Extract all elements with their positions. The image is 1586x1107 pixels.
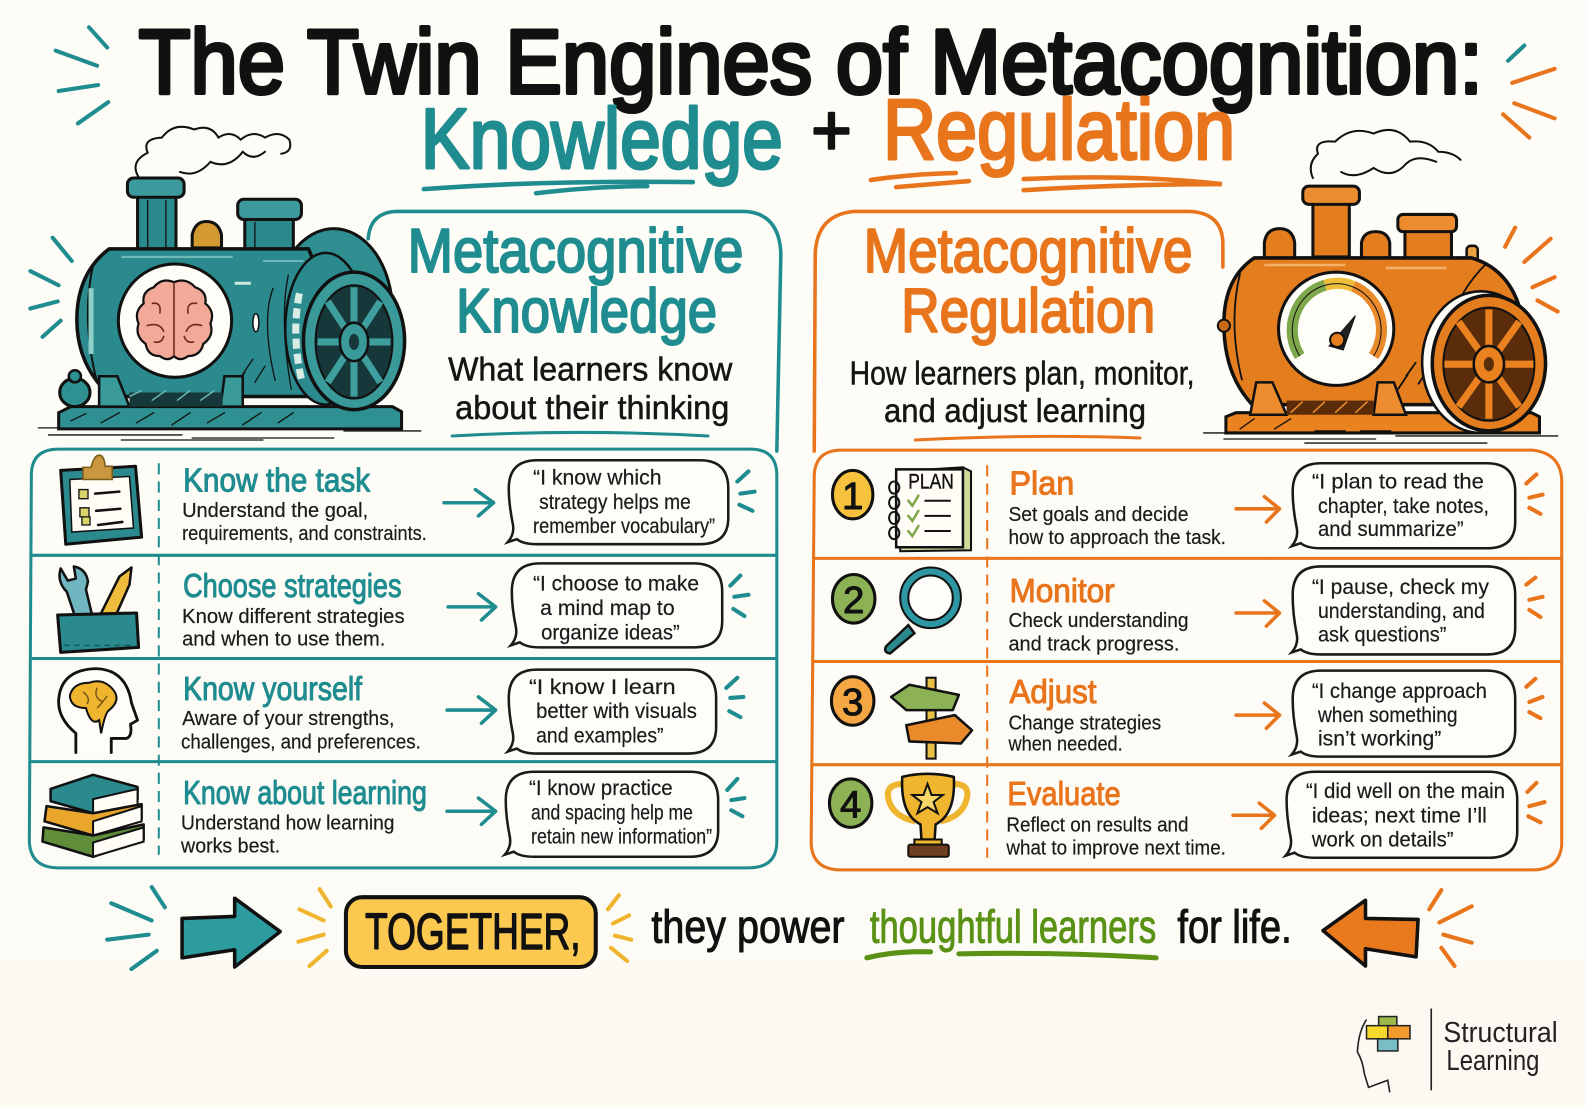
chimney back bbox=[245, 214, 293, 253]
rays bbox=[1526, 474, 1543, 514]
icon: magnifying glass bbox=[885, 567, 961, 653]
row: evaluate bbox=[829, 772, 1545, 860]
speech bubble bbox=[1286, 772, 1517, 858]
description: works best. bbox=[180, 836, 280, 858]
description bbox=[1008, 610, 1188, 655]
gauge bbox=[1279, 272, 1394, 385]
title word: Regulation: Regulation bbox=[883, 83, 1235, 178]
engine: regulation (orange with gauge) bbox=[1204, 130, 1558, 443]
knowledge underline bbox=[424, 182, 693, 193]
section heading: Metacognitive bbox=[408, 217, 743, 286]
speech bubble bbox=[508, 670, 716, 754]
engine rays right bbox=[1505, 228, 1558, 312]
speech bubble: retain new information” bbox=[531, 825, 712, 849]
speech bubble: remember vocabulary” bbox=[533, 514, 715, 538]
description: Check understanding bbox=[1008, 610, 1188, 632]
subtitle underline bbox=[915, 436, 1140, 440]
arrow bbox=[1236, 497, 1280, 522]
boiler body bbox=[1224, 258, 1525, 405]
flange bbox=[275, 229, 392, 394]
row: know about learning bbox=[42, 772, 744, 858]
regulation underline bbox=[871, 173, 1222, 190]
speech bubble: strategy helps me bbox=[539, 490, 691, 514]
legs and pump bbox=[99, 376, 243, 407]
panel: metacognitive knowledge bbox=[29, 211, 781, 868]
number badge 4 bbox=[829, 779, 872, 827]
description: Reflect on results and bbox=[1006, 814, 1188, 836]
window with brain bbox=[118, 264, 232, 377]
speech bubble: “I know practice bbox=[529, 776, 673, 800]
title bbox=[139, 12, 1483, 193]
arrow bbox=[448, 594, 496, 620]
icon: head with yellow brain bbox=[59, 669, 138, 753]
speech bubble: “I know which bbox=[533, 466, 662, 490]
speech bubble: organize ideas” bbox=[541, 620, 680, 644]
heading: Choose strategies bbox=[183, 568, 402, 605]
arrow bbox=[447, 798, 496, 824]
list frame bbox=[811, 450, 1562, 870]
logo divider bbox=[1430, 1008, 1432, 1090]
panel: metacognitive regulation bbox=[811, 211, 1562, 870]
number badge 1 bbox=[832, 470, 873, 519]
speech bubble bbox=[505, 772, 718, 857]
gauge dial arcs bbox=[1292, 285, 1325, 356]
speech bubble: ideas; next time I’ll bbox=[1312, 803, 1487, 827]
speech bubble bbox=[511, 563, 722, 647]
speech bubble: chapter, take notes, bbox=[1318, 494, 1489, 518]
section heading: Knowledge bbox=[456, 277, 717, 346]
description: Aware of your strengths, bbox=[182, 708, 394, 730]
section heading bbox=[864, 217, 1193, 346]
gauge needle bbox=[1329, 316, 1355, 350]
orange rays bbox=[1429, 890, 1472, 966]
heading: Know about learning bbox=[183, 775, 427, 812]
row: choose strategies bbox=[58, 563, 748, 652]
description: and track progress. bbox=[1008, 633, 1179, 655]
description bbox=[180, 812, 394, 858]
rays bbox=[726, 678, 743, 717]
row: plan bbox=[832, 463, 1543, 551]
highlighted words: thoughtful learners bbox=[870, 901, 1156, 953]
row: adjust bbox=[831, 671, 1543, 759]
icon: stack of books bbox=[42, 775, 144, 857]
section heading bbox=[408, 217, 743, 346]
speech bubble: and summarize” bbox=[1318, 517, 1464, 541]
engine: knowledge (teal with brain) bbox=[38, 127, 421, 440]
description: how to approach the task. bbox=[1008, 527, 1226, 549]
speech bubble: “I did well on the main bbox=[1306, 779, 1505, 803]
together badge bbox=[346, 897, 596, 967]
speech bubble: when something bbox=[1317, 703, 1458, 727]
logo: structural learning bbox=[1357, 1008, 1558, 1092]
rays bbox=[727, 779, 744, 816]
description: requirements, and constraints. bbox=[182, 523, 427, 545]
title line 1: The Twin Engines of Metacognition: bbox=[139, 12, 1483, 113]
heading: Evaluate bbox=[1007, 776, 1121, 813]
description: Know different strategies bbox=[182, 606, 405, 628]
row: know yourself bbox=[59, 669, 743, 754]
chimneys and domes bbox=[1313, 202, 1349, 257]
speech bubble: ask questions” bbox=[1318, 622, 1446, 646]
title rays left bbox=[56, 27, 108, 123]
section heading: Metacognitive bbox=[864, 217, 1193, 286]
engine rays left bbox=[30, 238, 72, 337]
description: what to improve next time. bbox=[1005, 838, 1226, 860]
header frame bbox=[368, 211, 781, 451]
section subtitle: and adjust learning bbox=[884, 393, 1146, 430]
speech bubble: work on details” bbox=[1311, 828, 1453, 852]
speech bubble: “I plan to read the bbox=[1312, 470, 1484, 494]
title rays right bbox=[1503, 46, 1555, 138]
speech bubble bbox=[508, 460, 728, 544]
number badge 4: 4 bbox=[840, 783, 861, 826]
description bbox=[1008, 504, 1226, 549]
logo blocks bbox=[1367, 1017, 1410, 1051]
section subtitle: What learners know bbox=[448, 351, 733, 388]
base plate bbox=[59, 407, 402, 429]
heading: Know yourself bbox=[183, 671, 363, 708]
section subtitle: How learners plan, monitor, bbox=[850, 355, 1195, 392]
flywheel bbox=[1422, 291, 1546, 433]
icon: toolbox with wrench and pencil bbox=[58, 566, 139, 652]
number badge 3: 3 bbox=[842, 681, 863, 724]
heading: Know the task bbox=[183, 463, 370, 500]
description: Understand the goal, bbox=[182, 500, 368, 522]
description bbox=[1008, 712, 1161, 756]
plus sign: + bbox=[811, 90, 852, 171]
speech bubble: understanding, and bbox=[1318, 599, 1485, 623]
title word: Knowledge: Knowledge bbox=[421, 92, 783, 187]
number badge 2: 2 bbox=[843, 579, 864, 622]
base plate bbox=[1226, 413, 1539, 433]
number badge 2 bbox=[832, 575, 875, 623]
header frame bbox=[814, 211, 1223, 451]
speech bubble bbox=[1292, 463, 1515, 548]
together badge: TOGETHER, bbox=[365, 903, 581, 960]
heading: Monitor bbox=[1009, 573, 1115, 610]
bell bbox=[192, 222, 222, 248]
row: monitor bbox=[832, 566, 1543, 655]
speech bubble: isn’t working” bbox=[1318, 726, 1441, 750]
teal block arrow bbox=[182, 898, 280, 967]
description bbox=[181, 708, 421, 754]
icon: trophy bbox=[888, 774, 967, 857]
rays bbox=[1526, 679, 1543, 718]
green underline bbox=[867, 952, 1156, 958]
yellow rays bbox=[298, 889, 631, 966]
rays bbox=[1526, 578, 1543, 617]
icon: signpost bbox=[891, 678, 972, 759]
arrow bbox=[447, 697, 496, 723]
speech bubble: better with visuals bbox=[536, 699, 697, 723]
rays bbox=[1527, 783, 1545, 822]
speech bubble: and examples” bbox=[536, 723, 664, 747]
legs bbox=[1250, 382, 1406, 415]
speech bubble: and spacing help me bbox=[531, 800, 693, 824]
icon: plan notebook bbox=[889, 467, 971, 551]
list frame bbox=[29, 449, 777, 868]
section subtitle: about their thinking bbox=[455, 390, 729, 427]
number badge 1: 1 bbox=[842, 475, 863, 518]
description: challenges, and preferences. bbox=[181, 732, 421, 754]
flywheel bbox=[285, 253, 405, 410]
description bbox=[182, 500, 427, 545]
speech bubble bbox=[1292, 566, 1515, 654]
orange block arrow bbox=[1323, 900, 1418, 966]
ground strokes bbox=[38, 428, 421, 440]
speech bubble: “I know I learn bbox=[529, 675, 676, 699]
arrow bbox=[444, 490, 494, 516]
ground strokes bbox=[1204, 433, 1558, 443]
section heading: Regulation bbox=[901, 277, 1155, 346]
section subtitle bbox=[850, 355, 1195, 430]
row: know the task bbox=[61, 455, 755, 545]
logo head outline bbox=[1357, 1020, 1390, 1092]
subtitle underline bbox=[452, 432, 708, 436]
description bbox=[1005, 814, 1226, 860]
smoke bbox=[136, 127, 290, 177]
arrow bbox=[1236, 601, 1280, 626]
smoke bbox=[1311, 130, 1461, 178]
icon: pink brain bbox=[137, 281, 212, 359]
speech bubble: a mind map to bbox=[540, 596, 675, 620]
number badge 3 bbox=[831, 677, 874, 725]
section subtitle bbox=[448, 351, 733, 427]
heading: Plan bbox=[1009, 466, 1074, 503]
description: Change strategies bbox=[1008, 712, 1161, 734]
description bbox=[182, 606, 405, 650]
speech bubble: “I choose to make bbox=[533, 572, 699, 596]
banner text: they power bbox=[651, 901, 845, 953]
arrow bbox=[1233, 803, 1274, 828]
description: Understand how learning bbox=[181, 812, 394, 834]
logo wordmark: Learning bbox=[1446, 1045, 1539, 1077]
heading: Adjust bbox=[1009, 674, 1097, 711]
logo wordmark bbox=[1443, 1017, 1558, 1077]
icon: plan notebook: PLAN bbox=[908, 470, 954, 494]
icon: clipboard bbox=[61, 455, 142, 544]
description: Set goals and decide bbox=[1008, 504, 1188, 526]
description: when needed. bbox=[1008, 734, 1123, 756]
rays bbox=[730, 576, 748, 616]
description: and when to use them. bbox=[182, 628, 385, 650]
speech bubble: “I change approach bbox=[1312, 679, 1487, 703]
banner: together they power thoughtful learners bbox=[107, 887, 1472, 969]
teal rays bbox=[107, 887, 165, 969]
speech bubble bbox=[1292, 671, 1515, 757]
logo wordmark: Structural bbox=[1443, 1017, 1558, 1049]
boiler body bbox=[77, 249, 324, 397]
speech bubble: “I pause, check my bbox=[1312, 575, 1489, 599]
arrow bbox=[1236, 703, 1280, 728]
banner text end: for life. bbox=[1177, 901, 1292, 953]
rays bbox=[737, 471, 755, 511]
